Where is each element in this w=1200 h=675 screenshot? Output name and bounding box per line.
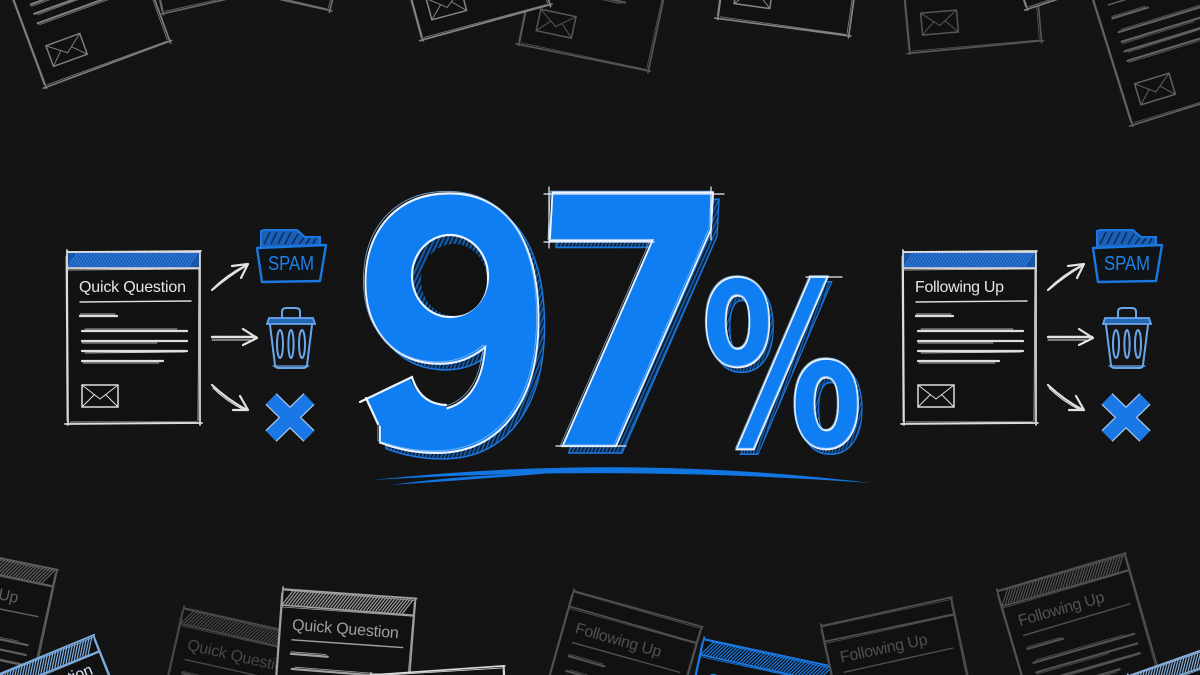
white chalk outline: 9 bbox=[350, 129, 558, 529]
email document: Quick Question: Quick Question bbox=[79, 279, 186, 296]
arrow to rejected, right bbox=[1048, 385, 1084, 410]
pale blue sketch outline: 9 bbox=[348, 127, 556, 527]
sketch overshoot strokes bbox=[544, 187, 842, 446]
faded document: top right stub bbox=[971, 0, 1155, 11]
faded document: top left bbox=[0, 0, 172, 89]
blue fill: % bbox=[701, 234, 863, 500]
faded document: top stub bbox=[123, 0, 294, 15]
arrow to spam bbox=[212, 264, 248, 290]
faded document: bottom far left bbox=[0, 541, 59, 675]
hatched extrusion shadow: 7 bbox=[520, 130, 746, 535]
faded document: behind right bbox=[516, 0, 686, 73]
email document: Quick Question bbox=[65, 250, 202, 425]
right email flow bbox=[901, 230, 1162, 436]
faded document: Following Up, no hatch bbox=[819, 596, 989, 675]
icon: blue cross, right bbox=[1107, 399, 1145, 436]
blue document: bottom left bbox=[0, 634, 160, 675]
faded document: Following Up, right: Following Up bbox=[1016, 589, 1107, 630]
email document: Following Up: Following Up bbox=[915, 279, 1004, 296]
faded document: Following Up, right bbox=[995, 552, 1175, 675]
icon: trash can, right bbox=[1103, 308, 1151, 368]
icon: spam folder: SPAM bbox=[268, 253, 314, 275]
faded document: top centre bbox=[715, 0, 875, 38]
email document: Following Up bbox=[901, 250, 1038, 425]
blue fill bbox=[350, 123, 863, 529]
faded document: top stub two bbox=[198, 0, 371, 13]
faded document: Quick Question bbox=[267, 587, 418, 675]
hatched extrusion shadow bbox=[356, 130, 867, 535]
white chalk outline: % bbox=[701, 234, 863, 500]
blue fill: 9 bbox=[350, 129, 558, 529]
faded document: Quick Question, dim bbox=[143, 606, 316, 675]
white document peeking at bottom edge bbox=[369, 665, 516, 675]
faded document: top centre left bbox=[375, 0, 552, 42]
icon: spam folder, right bbox=[1093, 230, 1162, 282]
big number 97% bbox=[348, 122, 867, 535]
faded document: top centre right bbox=[892, 0, 1044, 55]
bottom row of faded email documents bbox=[0, 541, 1200, 675]
white chalk outline bbox=[350, 123, 863, 529]
icon: spam folder bbox=[257, 230, 326, 282]
white chalk outline: 7 bbox=[514, 123, 740, 528]
arrow to trash, right bbox=[1048, 329, 1093, 345]
top row of faded email documents bbox=[0, 0, 1200, 127]
arrow to rejected bbox=[212, 385, 248, 410]
pale blue sketch outline: % bbox=[700, 233, 862, 499]
blue fill: 7 bbox=[514, 123, 740, 528]
sketch detail: flared tail of the 9 bbox=[360, 377, 452, 442]
sketch detail: rounder counter of the 9 bbox=[412, 216, 488, 330]
left email flow bbox=[65, 230, 326, 436]
arrow to trash bbox=[212, 329, 257, 345]
faded document: Quick Question: Quick Question bbox=[291, 617, 399, 642]
hatched extrusion shadow: % bbox=[705, 239, 867, 505]
hatched extrusion shadow: 9 bbox=[356, 135, 564, 535]
faded document: Following Up, centre: Following Up bbox=[573, 620, 663, 661]
blue underline stroke bbox=[373, 467, 872, 485]
arrow to spam, right bbox=[1048, 264, 1084, 290]
icon: trash can bbox=[267, 308, 315, 368]
blue document: bottom centre bbox=[664, 637, 836, 675]
icon: spam folder, right: SPAM bbox=[1104, 253, 1150, 275]
pale blue document: bottom right bbox=[1126, 630, 1200, 675]
pale blue sketch outline bbox=[348, 122, 862, 527]
icon: blue cross bbox=[271, 399, 309, 436]
faded document: Following Up, no hatch: Following Up bbox=[839, 631, 929, 667]
pale blue sketch outline: 7 bbox=[512, 122, 738, 527]
faded document: Following Up, centre bbox=[524, 588, 704, 675]
faded document: top right bbox=[1079, 0, 1200, 127]
